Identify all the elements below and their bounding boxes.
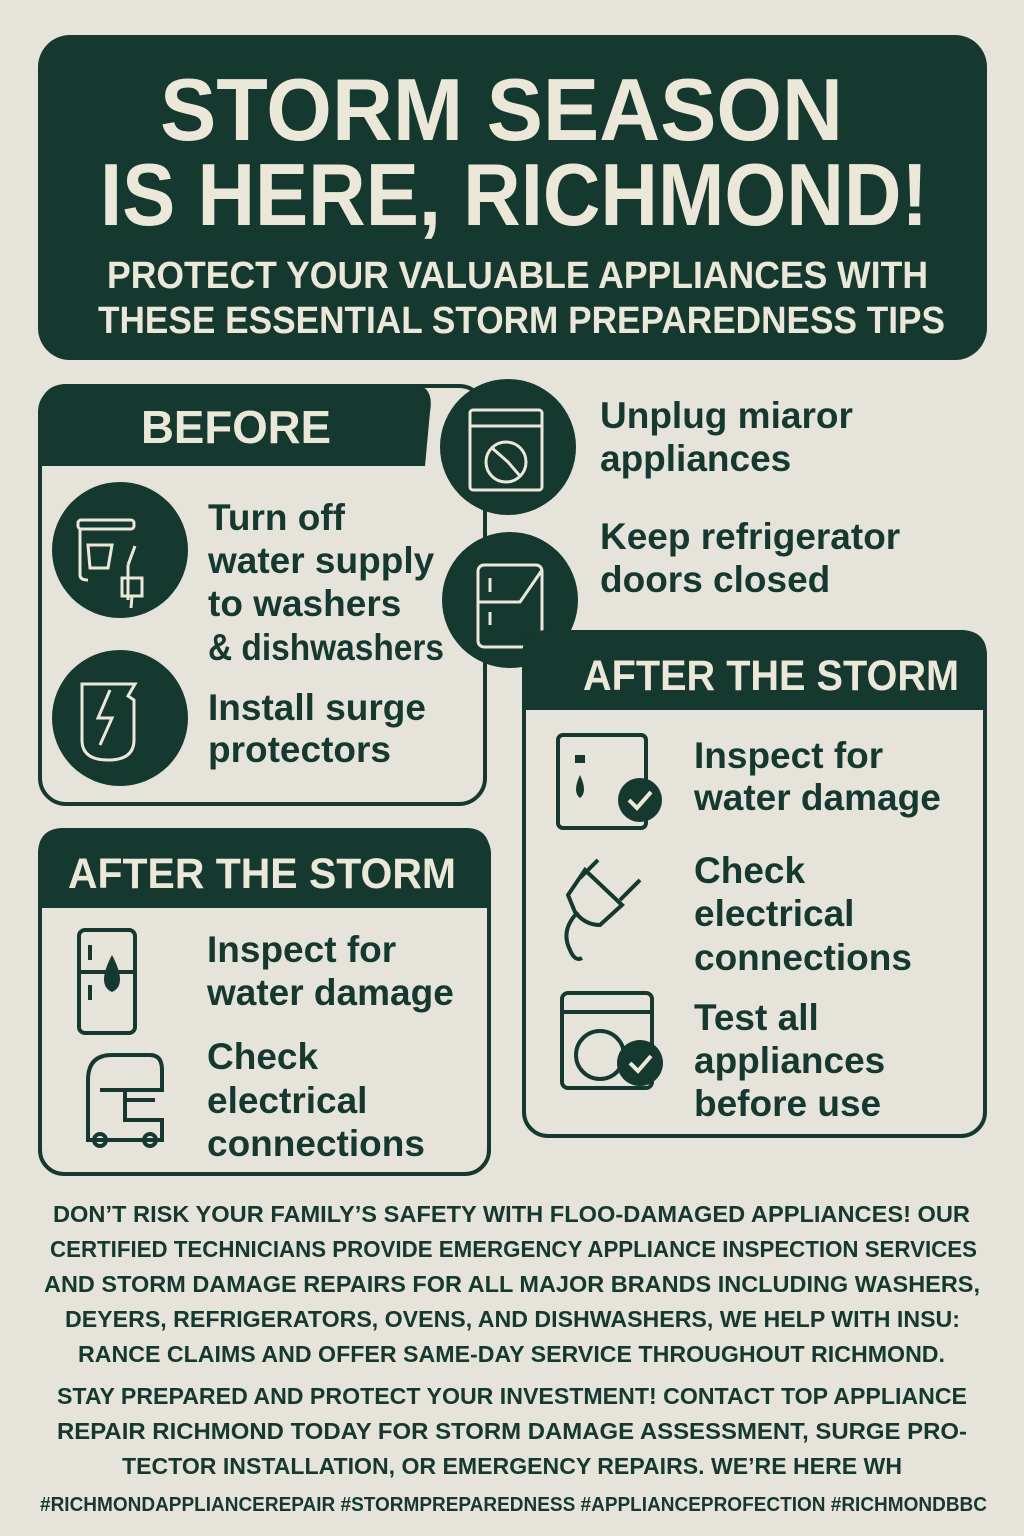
icon: surge protector: [52, 650, 188, 786]
text: [206, 929, 454, 1013]
text: [207, 1036, 425, 1164]
text: Inspect for: [694, 735, 883, 776]
heading: AFTER THE STORM: [68, 850, 456, 898]
text: turn off water: to washers: [208, 583, 401, 624]
text: before use: [694, 1083, 881, 1124]
text: install surge: [208, 687, 426, 770]
text block: paragraph 1: DEYERS, REFRIGERATORS, OVENS, AND DISHWASHERS, WE HELP WITH INSU:: [65, 1306, 960, 1332]
text block: paragraph 1: AND STORM DAMAGE REPAIRS FOR ALL MAJOR BRANDS INCLUDING WASHERS,: [44, 1271, 980, 1297]
panel: after the storm right: [522, 630, 987, 1136]
subtitle: PROTECT YOUR VALUABLE APPLIANCES WITH: [107, 255, 928, 297]
text: connections: [207, 1123, 425, 1164]
heading: AFTER THE STORM: [583, 652, 959, 700]
text: electrical: [207, 1080, 367, 1121]
text block: paragraph 1: DON’T RISK YOUR FAMILY’S SAFETY WITH FLOO-DAMAGED APPLIANCES! OUR: [53, 1201, 970, 1227]
icon: fridge water: [79, 930, 135, 1033]
text: Inspect for: [207, 929, 396, 970]
text: keep fridge closed: [600, 516, 900, 600]
text block: paragraph 2: REPAIR RICHMOND TODAY FOR STORM DAMAGE ASSESSMENT, SURGE PRO-: [57, 1418, 967, 1444]
heading: before: BEFORE: [141, 401, 331, 453]
panel: before: [40, 384, 485, 804]
text: connections: [694, 937, 912, 978]
subtitle: THESE ESSENTIAL STORM PREPAREDNESS TIPS: [98, 300, 945, 342]
text: turn off water: Turn off: [208, 497, 346, 538]
icon: test appliance: [562, 993, 663, 1088]
text block: paragraph 1: CERTIFIED TECHNICIANS PROVIDE EMERGENCY APPLIANCE INSPECTION SERVICES: [50, 1236, 977, 1262]
text block: paragraph 2: STAY PREPARED AND PROTECT YOUR INVESTMENT! CONTACT TOP APPLIANCE: [57, 1383, 967, 1409]
panel: after the storm left: [38, 828, 490, 1174]
text: turn off water: water supply: [207, 540, 435, 581]
header banner: [38, 35, 987, 360]
subtitle: [98, 255, 945, 342]
text block: paragraph 2: TECTOR INSTALLATION, OR EMERGENCY REPAIRS. WE’RE HERE WH: [122, 1453, 902, 1479]
text: appliances: [694, 1040, 885, 1081]
text block: paragraph 1: [44, 1201, 980, 1367]
icon: refrigerator: [442, 532, 578, 668]
icon: water supply: [52, 482, 188, 618]
icon: mixer: [88, 1055, 162, 1146]
hashtags: #RICHMONDAPPLIANCEREPAIR #STORMPREPAREDNESS #APPLIANCEPROFECTION #RICHMONDBBC: [40, 1494, 987, 1516]
icon: washer unplug: [440, 379, 576, 515]
text: unplug: Unplug miaror: [600, 395, 853, 436]
title: STORM SEASON: [160, 60, 843, 159]
text: keep fridge closed: Keep refrigerator: [600, 516, 900, 557]
text: [694, 997, 885, 1124]
text: install surge: Install surge: [208, 687, 426, 728]
text: turn off water: [207, 497, 444, 668]
text: [693, 735, 941, 818]
text: install surge: protectors: [208, 729, 391, 770]
text block: paragraph 2: [57, 1383, 967, 1479]
text: Check: [694, 850, 805, 891]
text: water damage: [693, 777, 941, 818]
text: keep fridge closed: doors closed: [600, 559, 830, 600]
text: unplug: appliances: [600, 438, 791, 479]
icon: water damage check: [558, 735, 662, 828]
icon: plug: [566, 860, 640, 959]
text: turn off water: & dishwashers: [208, 627, 444, 668]
text: electrical: [694, 893, 854, 934]
text: Test all: [694, 997, 819, 1038]
title: IS HERE, RICHMOND!: [100, 145, 928, 244]
text block: paragraph 1: RANCE CLAIMS AND OFFER SAME-DAY SERVICE THROUGHOUT RICHMOND.: [78, 1341, 945, 1367]
title: [100, 60, 928, 244]
text: Check: [207, 1036, 318, 1077]
text: unplug: [600, 395, 853, 479]
text: water damage: [206, 972, 454, 1013]
text: [694, 850, 912, 978]
